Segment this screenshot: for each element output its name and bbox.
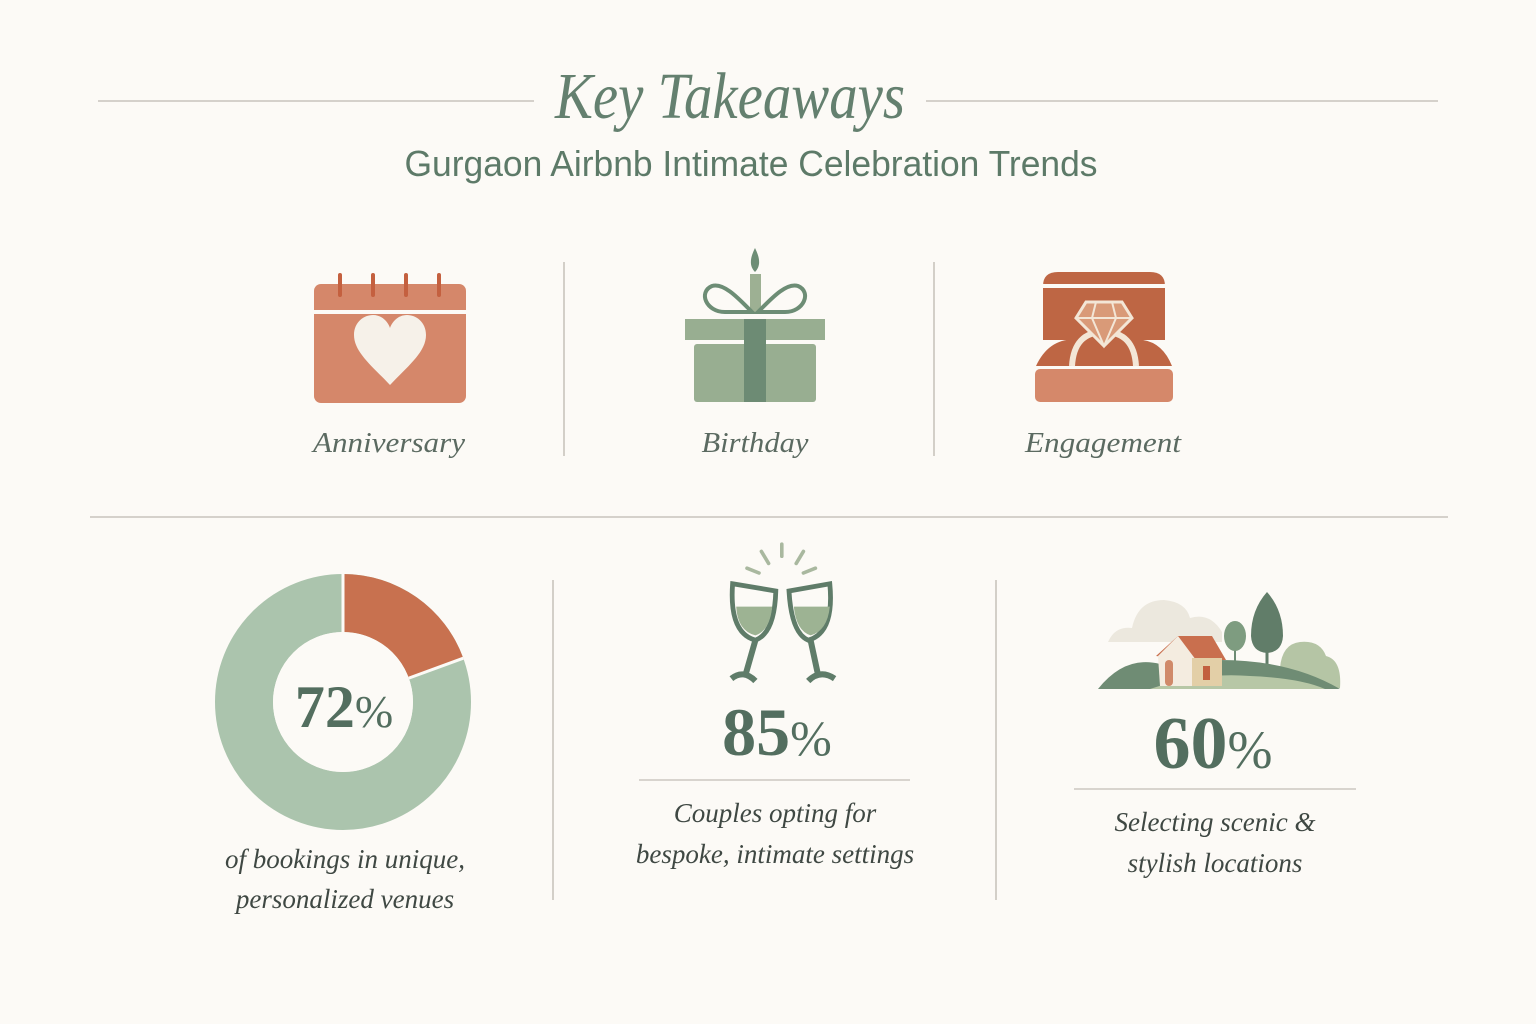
stat number: 72% <box>295 674 393 740</box>
icon: countryside house <box>1098 592 1340 689</box>
label: Birthday <box>702 427 809 459</box>
label: Engagement <box>1024 427 1182 459</box>
label: Anniversary <box>311 427 465 459</box>
panel: engagement <box>1024 272 1182 459</box>
description: bespoke, intimate settings <box>636 839 914 869</box>
panel: 60% <box>1074 592 1356 878</box>
description: Selecting scenic & <box>1115 807 1315 837</box>
icon: calendar heart <box>314 275 466 403</box>
panel: 85% <box>636 544 914 869</box>
description: personalized venues <box>234 884 454 914</box>
icon: gift with candle <box>685 248 825 402</box>
icon: champagne glasses <box>731 544 835 681</box>
panel: birthday <box>685 248 825 459</box>
description: Couples opting for <box>674 798 877 828</box>
panel: 72% <box>225 574 465 914</box>
description: of bookings in unique, <box>225 844 465 874</box>
description: stylish locations <box>1128 848 1302 878</box>
icon: ring box <box>1035 272 1173 402</box>
subtitle: Gurgaon Airbnb Intimate Celebration Trends <box>404 143 1098 184</box>
stat number: 60% <box>1154 703 1272 785</box>
title: Key Takeaways <box>554 60 905 133</box>
panel: anniversary <box>311 275 466 459</box>
stat number: 85% <box>722 694 832 770</box>
donut chart <box>244 574 463 801</box>
